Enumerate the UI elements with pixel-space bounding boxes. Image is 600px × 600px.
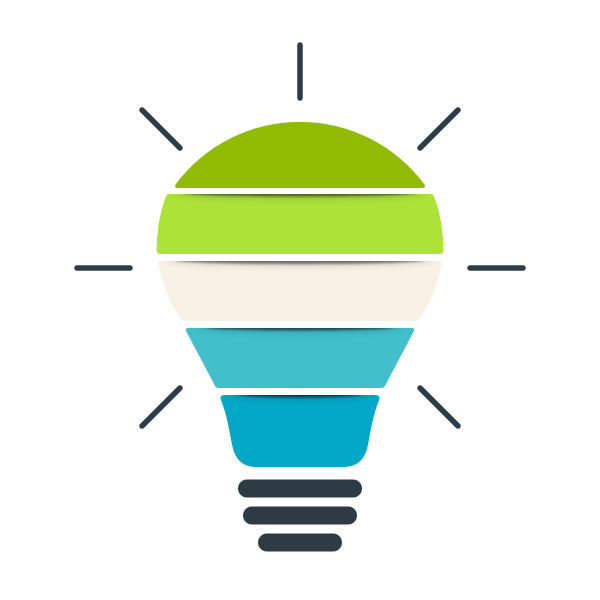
ray: right — [470, 265, 523, 271]
ray: bottom right — [420, 388, 458, 426]
base bar 3 — [258, 534, 342, 552]
base bar 2 — [243, 506, 357, 524]
bulb segment 2: light green band — [156, 188, 444, 254]
rays — [77, 45, 523, 426]
bulb segment 3: cream band — [158, 255, 442, 321]
bulb base — [238, 480, 362, 552]
ray: top — [297, 45, 303, 98]
ray: bottom left — [142, 388, 180, 426]
bulb segment 1: dome — [175, 122, 425, 188]
infographic: segmented light bulb — [74, 42, 526, 552]
ray: top left — [142, 110, 180, 148]
bulb segment 4: teal band — [186, 322, 414, 388]
bulb segment 5: blue band — [220, 389, 380, 467]
ray: left — [77, 265, 130, 271]
ray: top right — [420, 110, 458, 148]
base bar 1 — [238, 480, 362, 498]
